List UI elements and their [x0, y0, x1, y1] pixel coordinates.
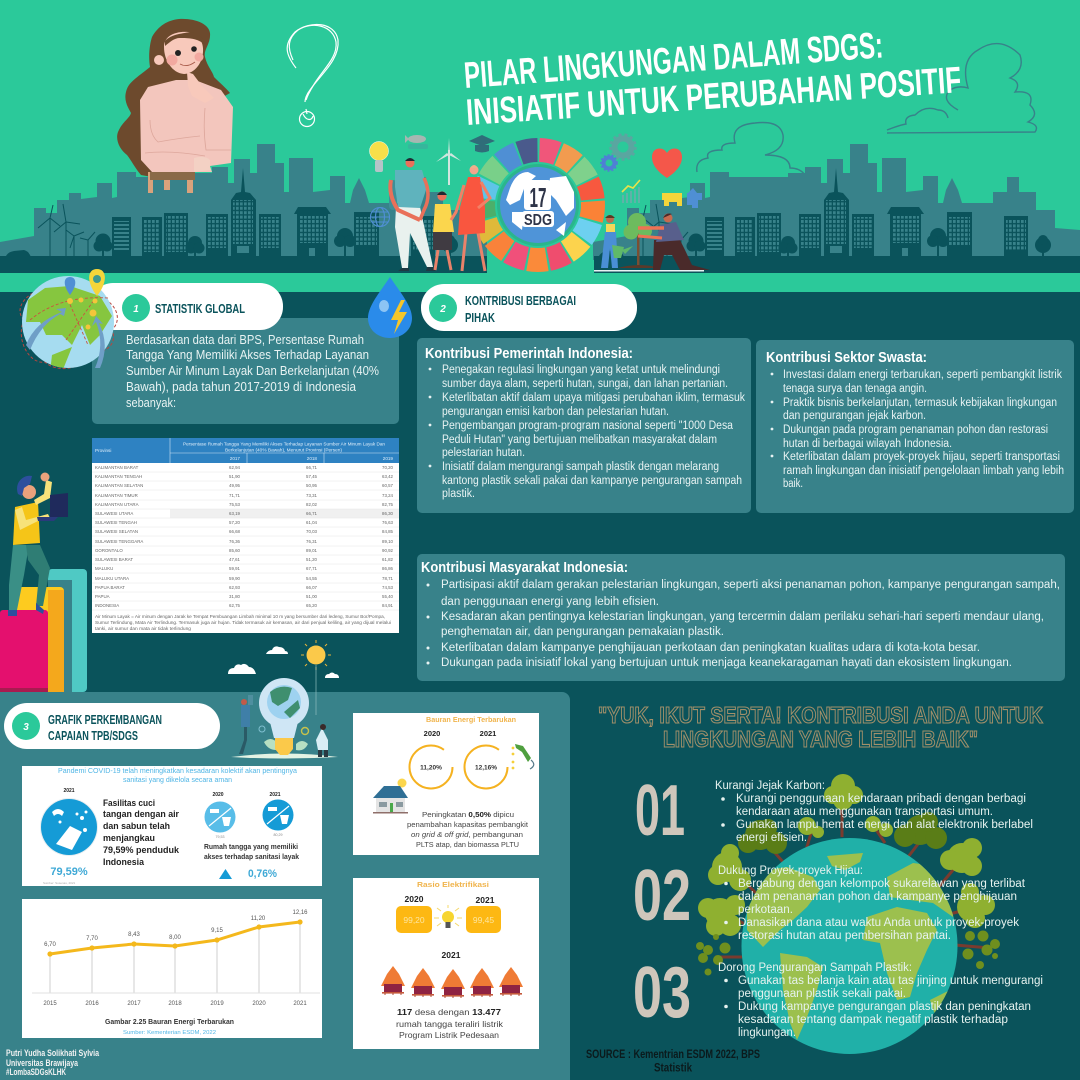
list: masyarakat: Dukungan pada inisiatif lokal yang bertujuan untuk menjaga keanekaragaman hayati dan ekosistem lingkungan. — [441, 657, 1012, 669]
hand washing metric: Sumber: Susenas, 2021 — [43, 881, 76, 885]
hand washing metric — [40, 788, 98, 885]
table: akses air minum per provinsi: 59,91 — [229, 566, 241, 571]
chart values: 9,15 — [211, 928, 223, 934]
chart caption: Gambar 2.25 Bauran Energi Terbarukan — [105, 1019, 234, 1026]
illustration: earth light bulb — [228, 640, 339, 758]
table: akses air minum per provinsi: 66,07 — [306, 585, 318, 590]
table: akses air minum per provinsi: 73,24 — [382, 493, 394, 498]
table: akses air minum per provinsi: 90,92 — [382, 548, 394, 553]
table: akses air minum per provinsi — [92, 438, 399, 633]
table: akses air minum per provinsi: 86,86 — [382, 566, 394, 571]
chart years — [43, 1001, 307, 1007]
hand washing metric: 2021 — [63, 788, 75, 794]
table: akses air minum per provinsi: 73,31 — [306, 493, 318, 498]
icon: SDG wheel: 17 — [530, 182, 546, 213]
card: rasio elektrifikasi: 2020 — [405, 894, 424, 904]
table: akses air minum per provinsi: SULAWESI UTARA — [95, 511, 133, 516]
number 03: 03 — [633, 953, 691, 1033]
section pill 2: KONTRIBUSI BERBAGAI — [465, 293, 576, 308]
table: akses air minum per provinsi: SULAWESI TENGAH — [95, 520, 137, 525]
green header background — [0, 0, 1080, 292]
table: akses air minum per provinsi: 70,03 — [306, 529, 318, 534]
icon: graduation cap — [469, 135, 495, 152]
hand washing text — [103, 798, 180, 868]
section pill 1: STATISTIK GLOBAL — [155, 301, 245, 316]
number 02: 02 — [633, 856, 691, 936]
headline: ajakan: LINGKUNGAN YANG LEBIH BAIK" — [663, 726, 978, 752]
ring 2020 — [410, 746, 452, 788]
hand washing text: dan sabun telah — [103, 821, 170, 832]
table: akses air minum per provinsi: 82,75 — [382, 502, 394, 507]
list: swasta: tenaga surya dan tenaga angin. — [783, 383, 927, 395]
table: akses air minum per provinsi: tanki, air sumur dan mata air tidak terlindung — [95, 626, 192, 631]
section pill 1 — [90, 283, 283, 330]
chart years: 2015 — [43, 1001, 57, 1007]
panel: kontribusi sektor swasta — [756, 340, 1074, 513]
table: akses air minum per provinsi: 66,71 — [306, 465, 318, 470]
sanitation metric: 80,29 — [274, 833, 282, 837]
sanitation metric: 79,53 — [216, 835, 224, 839]
chart years: 2020 — [252, 1001, 266, 1007]
action 02 text: Dukung Proyek-proyek Hijau: — [718, 865, 863, 877]
table: akses air minum per provinsi: 59,90 — [229, 576, 241, 581]
village text: 117 desa dengan 13.477 — [397, 1007, 501, 1017]
section pill 3: 3 — [23, 722, 29, 733]
action 02 text: perkotaan. — [738, 904, 793, 916]
sanitation metric: 2020 — [212, 792, 224, 798]
credits: Putri Yudha Solikhati Sylvia — [6, 1048, 100, 1058]
chart values: 8,00 — [169, 935, 181, 941]
chart years: 2018 — [168, 1001, 182, 1007]
illustration: gardener and tree planter — [594, 213, 710, 272]
chart values: 6,70 — [44, 942, 56, 948]
table: akses air minum per provinsi: KALIMANTAN TIMUR — [95, 493, 138, 498]
table: akses air minum per provinsi: SULAWESI BARAT — [95, 557, 133, 562]
table: akses air minum per provinsi: 54,55 — [306, 576, 318, 581]
village text: rumah tangga teraliri listrik — [396, 1019, 504, 1029]
village text: Program Listrik Pedesaan — [399, 1030, 499, 1040]
outlined clouds — [697, 44, 1036, 175]
hand washing metric: 79,59% — [50, 866, 88, 878]
action 02 text: restorasi hutan atau pembersihan pantai. — [738, 930, 951, 942]
table: akses air minum per provinsi: INDONESIA — [95, 603, 119, 608]
list: pemerintah: pengurangan emisi karbon dan pelestarian hutan. — [442, 406, 669, 418]
section pill 1: 1 — [133, 304, 139, 315]
chart values: 8,43 — [128, 932, 140, 938]
section pill 2: 2 — [439, 304, 446, 315]
table: akses air minum per provinsi: SULAWESI TENGGARA — [95, 539, 143, 544]
card: rasio elektrifikasi — [353, 878, 539, 1049]
chart values — [44, 910, 308, 948]
table: akses air minum per provinsi: 51,00 — [306, 594, 318, 599]
table: akses air minum per provinsi: 89,01 — [306, 548, 318, 553]
card: bauran energi terbarukan: 2021 — [480, 729, 496, 738]
value 2021 — [466, 906, 501, 933]
table: akses air minum per provinsi: 57,20 — [229, 520, 241, 525]
table: akses air minum per provinsi: KALIMANTAN UTARA — [95, 502, 139, 507]
list: masyarakat: dan penggunaan energi yang lebih efisien. — [441, 596, 659, 608]
source note: Statistik — [654, 1060, 692, 1074]
icon: light bulb — [370, 142, 388, 172]
icon: hand drawn question mark — [287, 24, 338, 126]
action 01 text: kendaraan atau menggunakan transportasi umum. — [736, 806, 993, 818]
list: masyarakat: Partisipasi aktif dalam gerakan pelestarian lingkungan, seperti aksi penanaman pohon, kampanye pengurangan sampah, — [441, 579, 1060, 591]
number 01: 01 — [635, 771, 685, 851]
card: bauran energi terbarukan: Bauran Energi Terbarukan — [426, 715, 516, 724]
heading: pemerintah: Kontribusi Pemerintah Indonesia: — [425, 346, 633, 362]
action 01 text — [715, 780, 1033, 844]
table: akses air minum per provinsi: 84,91 — [382, 603, 394, 608]
action 02 text — [718, 865, 1026, 942]
panel text: statistik global: Berdasarkan data dari BPS, Persentase Rumah — [126, 333, 364, 347]
table: akses air minum per provinsi: 65,20 — [306, 603, 318, 608]
list: masyarakat: Kesadaran akan pentingnya kelestarian lingkungan, yang tercermin dalam perilaku sehari-hari seperti mendaur ulang, — [441, 611, 1044, 623]
table: akses air minum per provinsi: 71,71 — [229, 493, 241, 498]
table: akses air minum per provinsi: 63,19 — [229, 511, 241, 516]
table: akses air minum per provinsi: Berkelanjutan (40% Bawah), Menurut Provinsi (Persen) — [225, 448, 342, 452]
value 2021: 99,45 — [473, 915, 494, 925]
heading: masyarakat: Kontribusi Masyarakat Indonesia: — [421, 560, 628, 576]
table: akses air minum per provinsi: KALIMANTAN BARAT — [95, 465, 139, 470]
table: akses air minum per provinsi: 86,30 — [382, 511, 394, 516]
source note: SOURCE : Kementrian ESDM 2022, BPS — [586, 1047, 760, 1061]
chart values: 7,70 — [86, 936, 98, 942]
card: rasio elektrifikasi: 2021 — [476, 895, 495, 905]
sanitation metric: Rumah tangga yang memiliki — [204, 844, 298, 851]
panel: kontribusi pemerintah — [417, 338, 751, 513]
panel: kontribusi masyarakat — [417, 554, 1065, 681]
action 01 text: Kurangi Jejak Karbon: — [715, 780, 825, 792]
chart years: 2021 — [293, 1001, 307, 1007]
panel text: statistik global: sebanyak: — [126, 396, 176, 410]
icon: water drop with lightning — [368, 277, 412, 338]
list: pemerintah: kantong plastik sekali pakai dan kampanye pengurangan sampah — [442, 475, 742, 487]
table: akses air minum per provinsi: 82,02 — [306, 502, 318, 507]
panel text: statistik global: Tangga Yang Memiliki Akses Terhadap Layanan — [126, 348, 369, 362]
card: line chart bauran energi — [22, 899, 322, 1038]
card title — [58, 766, 297, 784]
list: pemerintah: Peduli Hutan" yang bertujuan melibatkan masyarakat dalam — [442, 434, 717, 446]
action 02 text: dalam penanaman pohon dan kampanye penghijauan — [738, 891, 1017, 903]
card title: sanitasi yang dikelola secara aman — [123, 775, 232, 784]
table: akses air minum per provinsi: 66,68 — [229, 529, 241, 534]
table: akses air minum per provinsi: KALIMANTAN TENGAH — [95, 474, 142, 479]
hand washing text: menjangkau — [103, 833, 155, 844]
list: pemerintah: Pengembangan program-program nasional seperti "1000 Desa — [442, 420, 734, 432]
energy text — [407, 810, 529, 849]
table: akses air minum per provinsi: MALUKU UTARA — [95, 576, 129, 581]
village text — [396, 1007, 504, 1040]
card: bauran energi terbarukan — [353, 713, 539, 855]
energy text: Peningkatan 0,50% dipicu — [422, 810, 514, 819]
table: akses air minum per provinsi: 74,53 — [382, 585, 394, 590]
icon: stilt houses — [381, 966, 523, 998]
panel text: statistik global: Sumber Air Minum Layak Dan Berkelanjutan (40% — [126, 364, 379, 378]
sanitation metric: akses terhadap sanitasi layak — [204, 854, 299, 861]
credits: Universitas Brawijaya — [6, 1058, 79, 1068]
section pill 3 — [4, 703, 220, 749]
action 03 text: Dukung kampanye pengurangan plastik dan peningkatan — [738, 1001, 1031, 1013]
hand washing text: Fasilitas cuci — [103, 798, 155, 809]
table: akses air minum per provinsi: KALIMANTAN SELATAN — [95, 483, 143, 488]
energy text: on grid & off grid , pembangunan — [411, 830, 523, 839]
table: akses air minum per provinsi: 2017 — [230, 456, 240, 461]
illustration: thinking woman — [117, 19, 233, 193]
sanitation metric: 2021 — [269, 792, 281, 798]
section pill 2: PIHAK — [465, 310, 495, 325]
action 03 text — [718, 962, 1043, 1039]
list: masyarakat: Keterlibatan dalam kampanye penghijauan perkotaan dan peningkatan kualitas udara di kota-kota besar. — [441, 642, 980, 654]
table: akses air minum per provinsi: 75,53 — [229, 502, 241, 507]
icon: gears — [601, 134, 636, 171]
action 01 text: Gunakan lampu hemat energi dan alat elektronik berlabel — [736, 819, 1033, 831]
list: swasta: Praktik bisnis berkelanjutan, termasuk kebijakan lingkungan — [783, 397, 1057, 409]
table: akses air minum per provinsi: 85,60 — [229, 548, 241, 553]
action 01 text: Kurangi penggunaan kendaraan pribadi dengan berbagi — [736, 793, 1026, 805]
city skyline left — [0, 144, 487, 273]
chart years: 2019 — [210, 1001, 224, 1007]
icon: wind turbine — [436, 138, 461, 185]
icon: network globe — [370, 208, 390, 226]
icon: fuel nozzle — [512, 744, 534, 769]
icon: SDG wheel — [460, 127, 616, 283]
table: akses air minum per provinsi: 62,75 — [229, 603, 241, 608]
energy text: penambahan kapasitas pembangkit — [407, 820, 529, 829]
icon: glowing bulb — [434, 905, 462, 928]
title — [463, 24, 962, 133]
action 03 text: Dorong Pengurangan Sampah Plastik: — [718, 962, 912, 974]
source note — [586, 1047, 760, 1074]
chart years: 2016 — [85, 1001, 99, 1007]
table: akses air minum per provinsi: 76,36 — [229, 539, 241, 544]
heading: swasta: Kontribusi Sektor Swasta: — [766, 350, 927, 366]
list: pemerintah: pelestarian hutan. — [442, 447, 525, 459]
table: akses air minum per provinsi: 2018 — [307, 456, 317, 461]
icon: growth chart — [622, 180, 640, 203]
city skyline right — [593, 144, 1080, 273]
list: swasta: dan pengurangan jejak karbon. — [783, 410, 926, 422]
action 01 text: energi efisien. — [736, 832, 807, 844]
table: akses air minum per provinsi: 50,95 — [306, 483, 318, 488]
action 03 text: kesadaran tentang dampak negatif plastik terhadap — [738, 1014, 1008, 1026]
table: akses air minum per provinsi: 76,63 — [382, 520, 394, 525]
value 2020: 99,20 — [403, 915, 425, 925]
section pill 2 — [421, 284, 637, 331]
table: akses air minum per provinsi: Provinsi — [95, 448, 111, 453]
card: sanitasi — [22, 766, 322, 886]
table: akses air minum per provinsi: 49,95 — [229, 483, 241, 488]
table: akses air minum per provinsi: 62,94 — [229, 465, 241, 470]
list: pemerintah: Keterlibatan aktif dalam upaya mitigasi perubahan iklim, termasuk — [442, 392, 745, 404]
table: akses air minum per provinsi: 89,10 — [382, 539, 394, 544]
icon: globe with routes — [20, 269, 117, 372]
table: akses air minum per provinsi: 66,71 — [306, 511, 318, 516]
list: swasta: baik. — [783, 478, 803, 490]
chart years: 2017 — [127, 1001, 141, 1007]
list: pemerintah: Penegakan regulasi lingkungan yang ketat untuk melindungi — [442, 364, 720, 376]
green band — [0, 273, 1080, 292]
section pill 3: GRAFIK PERKEMBANGAN — [48, 712, 162, 727]
icon: solar house — [373, 778, 408, 814]
card title: Pandemi COVID-19 telah meningkatkan kesadaran kolektif akan pentingnya — [58, 766, 297, 775]
value 2020 — [396, 906, 432, 933]
table: akses air minum per provinsi: 55,40 — [382, 594, 394, 599]
chart values: 12,16 — [292, 910, 308, 916]
sanitation metric — [204, 792, 299, 880]
illustration: earth with trees — [696, 774, 1000, 1054]
icon: fish — [405, 135, 428, 149]
list: pemerintah: Inisiatif dalam mengurangi sampah plastik dengan melarang — [442, 461, 719, 473]
table: akses air minum per provinsi: MALUKU — [95, 566, 113, 571]
table: akses air minum per provinsi: 61,82 — [382, 557, 394, 562]
table: akses air minum per provinsi: 57,45 — [306, 474, 318, 479]
table: akses air minum per provinsi: GORONTALO — [95, 548, 123, 553]
table: akses air minum per provinsi: 62,93 — [229, 585, 241, 590]
table: akses air minum per provinsi: 76,31 — [306, 539, 318, 544]
card: bauran energi terbarukan: 2020 — [424, 729, 440, 738]
list: pemerintah — [429, 364, 745, 500]
headline: ajakan — [598, 702, 1043, 752]
table: akses air minum per provinsi: 63,42 — [382, 474, 394, 479]
action 03 text: lingkungan. — [738, 1027, 796, 1039]
section pill 3: CAPAIAN TPB/SDGS — [48, 728, 138, 743]
table: akses air minum per provinsi: 51,20 — [306, 557, 318, 562]
energy text: PLTS atap, dan biomassa PLTU — [416, 840, 519, 849]
ring 2021: 12,16% — [475, 764, 497, 772]
table: akses air minum per provinsi: SULAWESI SELATAN — [95, 529, 138, 534]
table: akses air minum per provinsi: 47,61 — [229, 557, 241, 562]
list: swasta: hutan di berbagai wilayah Indonesia. — [783, 438, 952, 450]
hand washing text: Indonesia — [103, 857, 145, 868]
chart values: 11,20 — [251, 916, 266, 922]
list: swasta: Dukungan pada program penanaman pohon dan restorasi — [783, 424, 1048, 436]
table: akses air minum per provinsi: 70,20 — [382, 465, 394, 470]
table: akses air minum per provinsi: 31,80 — [229, 594, 241, 599]
illustration: family — [389, 158, 490, 271]
card: rasio elektrifikasi: 2021 — [442, 950, 461, 960]
sanitation metric: 0,76% — [248, 868, 277, 880]
list: masyarakat — [426, 579, 1060, 669]
table: akses air minum per provinsi: PAPUA BARAT — [95, 585, 125, 590]
illustration: person on bar chart — [0, 472, 87, 692]
table: akses air minum per provinsi: 51,90 — [229, 474, 241, 479]
table: akses air minum per provinsi: 78,71 — [382, 576, 394, 581]
table: akses air minum per provinsi: Persentase Rumah Tangga Yang Memiliki Akses Terhadap Layanan Sumber Air Minum Layak Dan — [183, 442, 385, 446]
icon: SDG wheel: SDG — [524, 212, 552, 229]
ring 2021 — [464, 746, 508, 788]
action 02 text: Bergabung dengan kelompok sukarelawan yang terlibat — [738, 878, 1026, 890]
table: akses air minum per provinsi: Air Minum Layak = Air minum dengan Jarak ke Tempat Pembuangan Limbah minimal 10 m yang bersumber dari ledeng, Sumur Bor/Pompa, — [95, 614, 385, 619]
list: pemerintah: plastik. — [442, 488, 475, 500]
list: swasta — [771, 369, 1064, 490]
action 02 text: Danasikan dana atau waktu Anda untuk proyek-proyek — [738, 917, 1019, 929]
hand washing text: tangan dengan air — [103, 809, 179, 820]
panel: statistik global — [92, 318, 399, 424]
action 03 text: Gunakan tas belanja kain atau tas jinjing untuk mengurangi — [738, 975, 1043, 987]
table: akses air minum per provinsi: PAPUA — [95, 594, 110, 599]
icon: puzzle pieces — [662, 188, 702, 208]
table: akses air minum per provinsi: 61,04 — [306, 520, 318, 525]
panel text: statistik global: Bawah), pada tahun 2017-2019 di Indonesia — [126, 380, 356, 394]
hand washing text: 79,59% penduduk — [103, 845, 180, 856]
table: akses air minum per provinsi: 84,85 — [382, 529, 394, 534]
dark page background — [0, 292, 1080, 1080]
table: akses air minum per provinsi: Sumur Terlindung, Mata Air Terlindung. Termasuk juga air hujan. Tidak termasuk air kemasan, air dari penjual keliling, air yang dijual melalui — [95, 620, 391, 625]
card: rasio elektrifikasi: Rasio Elektrifikasi — [417, 880, 489, 889]
list: swasta: Keterlibatan dalam proyek-proyek hijau, seperti transportasi — [783, 451, 1060, 463]
chart source: Sumber: Kementerian ESDM, 2022 — [123, 1030, 216, 1036]
panel: capaian background — [0, 692, 570, 1080]
credits — [6, 1048, 100, 1077]
list: masyarakat: penghematan air, dan pengurangan pemakaian plastik. — [441, 626, 724, 638]
panel text: statistik global — [126, 333, 379, 410]
table: akses air minum per provinsi: 2019 — [383, 456, 393, 461]
list: pemerintah: sumber daya alam, seperti hutan, sungai, dan lahan pertanian. — [442, 378, 728, 390]
table: akses air minum per provinsi: 67,71 — [306, 566, 318, 571]
ring 2020: 11,20% — [420, 764, 442, 772]
credits: #LombaSDGsKLHK — [6, 1067, 66, 1077]
action 03 text: penggunaan plastik sekali pakai. — [738, 988, 906, 1000]
table: akses air minum per provinsi: 60,57 — [382, 483, 394, 488]
icon: heart — [652, 148, 682, 178]
